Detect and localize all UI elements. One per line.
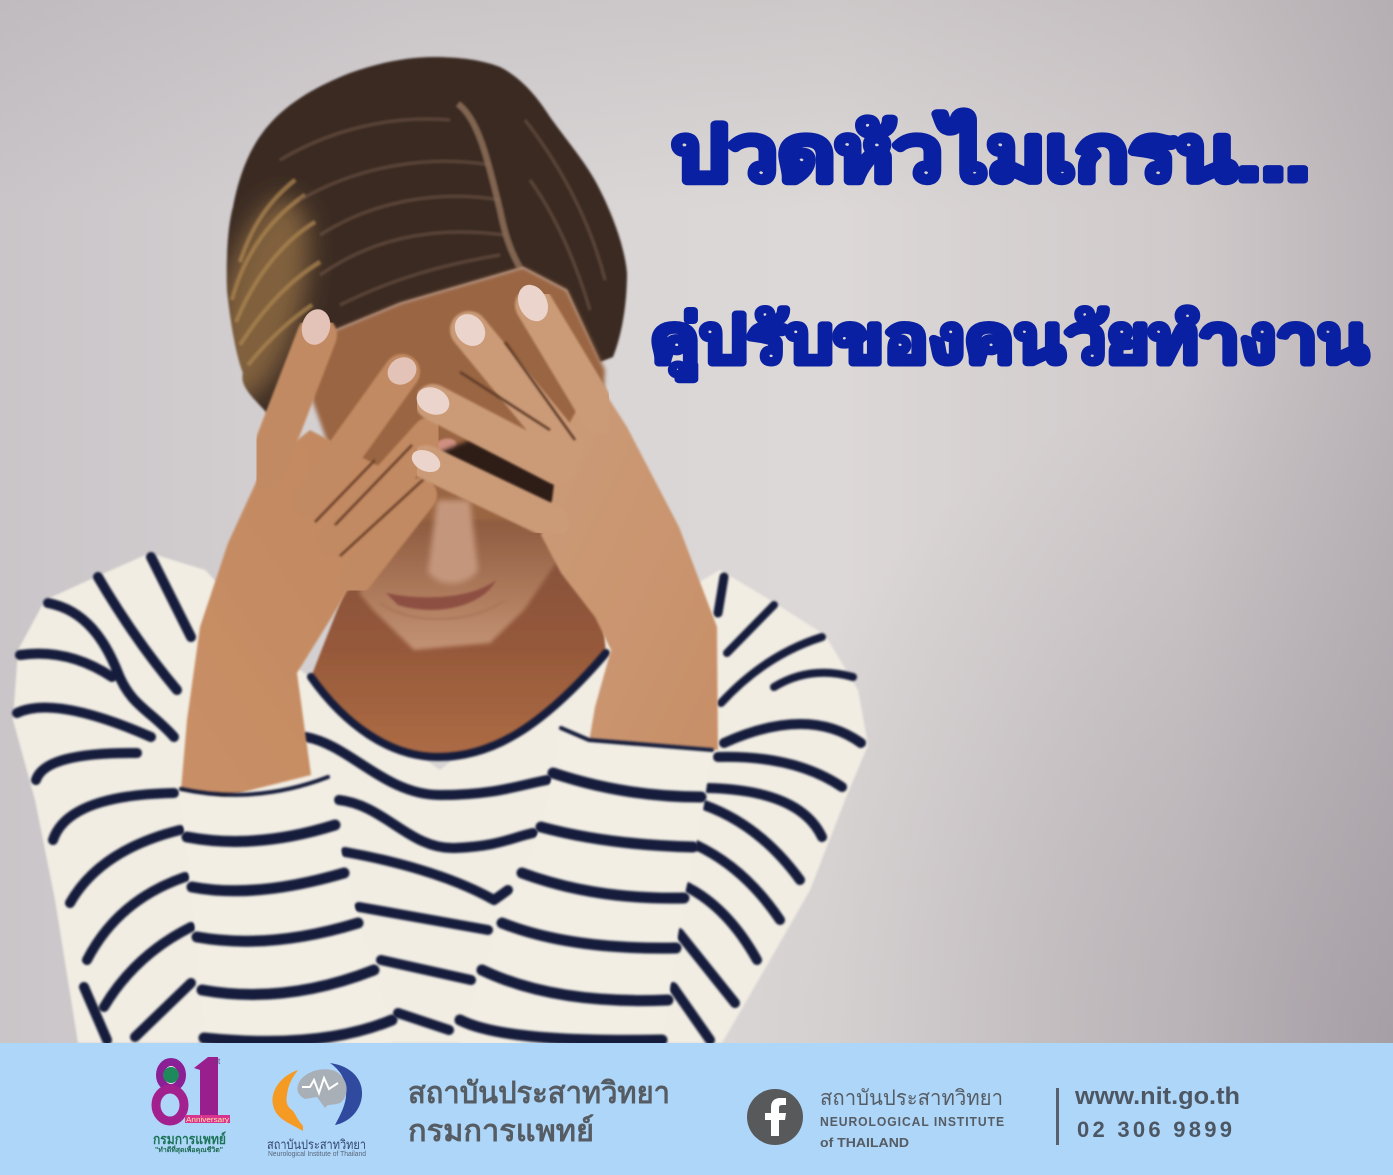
logo: 81st anniversary: "ทำดีที่สุดเพื่อคุณชีวิต" (155, 1144, 223, 1154)
left sleeve (180, 777, 392, 1043)
divider (1056, 1088, 1059, 1145)
logo: 81st anniversary: st (214, 1057, 221, 1066)
website and phone: www.nit.go.th (1074, 1083, 1240, 1110)
logo: neurological institute: สถาบันประสาทวิทยา (267, 1137, 366, 1152)
facebook page name: สถาบันประสาทวิทยา (820, 1087, 1003, 1110)
right hand nails (408, 280, 554, 476)
hair (196, 57, 627, 413)
title (650, 110, 1368, 381)
left hand (181, 306, 430, 797)
logo: 81st anniversary (153, 1057, 230, 1154)
institute name (408, 1077, 670, 1148)
logo: 81st anniversary: Anniversary (186, 1117, 230, 1124)
logo: neurological institute (267, 1063, 366, 1158)
facebook page name (820, 1087, 1005, 1150)
right sleeve (460, 728, 712, 1043)
website and phone: 02 306 9899 (1077, 1117, 1232, 1142)
left hand nails (298, 306, 422, 390)
facebook page name: of THAILAND (820, 1135, 909, 1150)
institute name: สถาบันประสาทวิทยา (408, 1077, 670, 1110)
shadow behind fingers (440, 440, 560, 505)
facebook page name: NEUROLOGICAL INSTITUTE (820, 1114, 1005, 1129)
face: forehead, nose, mouth, chin (300, 267, 605, 650)
sweater body (13, 553, 868, 1043)
institute name: กรมการแพทย์ (408, 1114, 594, 1148)
right hand (408, 280, 718, 750)
footer band (0, 1043, 1393, 1175)
sweater stripes: shoulders and torso (17, 557, 861, 1040)
neck and chest (311, 540, 606, 757)
photo: woman holding her head (13, 57, 868, 1043)
icon: facebook (747, 1089, 803, 1145)
title line 2: คู่ปรับของคนวัยทำงาน (650, 302, 1368, 381)
nose bridge visible between fingers (431, 435, 459, 459)
website and phone (1074, 1083, 1240, 1142)
title line 1: ปวดหัวไมเกรน... (672, 110, 1310, 197)
logo: 81st anniversary: กรมการแพทย์ (153, 1131, 226, 1147)
hair parting (458, 104, 520, 268)
logo: neurological institute: Neurological Institute of Thailand (268, 1151, 366, 1158)
